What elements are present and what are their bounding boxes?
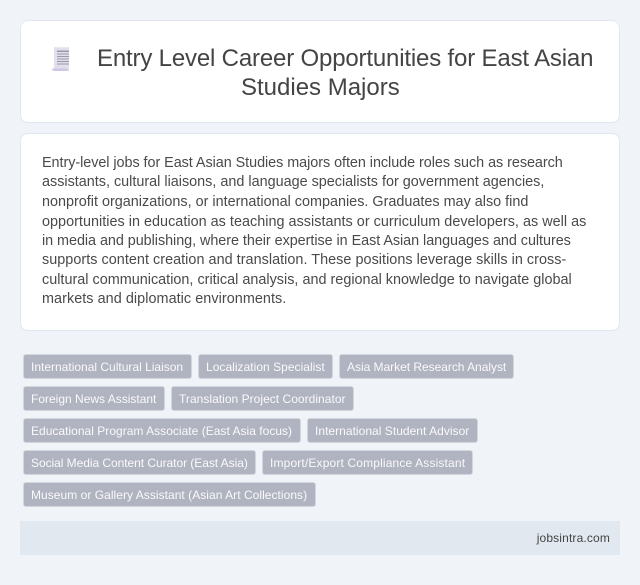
description text: Entry-level jobs for East Asian Studies majors often include roles such as research	[42, 155, 563, 171]
description text: markets and diplomatic environments.	[42, 291, 286, 307]
tag: Museum or Gallery Assistant (Asian Art Collections)	[31, 488, 307, 502]
tag: Localization Specialist	[206, 360, 325, 374]
description text	[42, 155, 586, 307]
tag	[23, 450, 256, 475]
description text: assistants, cultural liaisons, and language specialists for government agencies,	[42, 174, 544, 190]
title: Entry Level Career Opportunities for East Asian	[97, 45, 593, 72]
icon: document scroll	[52, 47, 70, 71]
tag	[339, 354, 514, 379]
tag	[23, 386, 165, 411]
tag: International Cultural Liaison	[31, 360, 183, 374]
title line 2: Studies Majors	[241, 74, 400, 101]
description text: in media and publishing, where their expertise in East Asian languages and cultures	[42, 233, 571, 249]
tag	[262, 450, 473, 475]
panel: title card	[20, 20, 620, 123]
tag	[307, 418, 478, 443]
panel: description card	[20, 133, 620, 331]
description text: supports content creation and translation. These positions leverage skills in cross-	[42, 252, 566, 268]
tag	[198, 354, 333, 379]
description text: nonprofit organizations, or international companies. Graduates may also find	[42, 194, 528, 210]
tag: Educational Program Associate (East Asia focus)	[31, 424, 292, 438]
tag	[171, 386, 354, 411]
description text: opportunities in education as teaching assistants or curriculum developers, as well as	[42, 214, 586, 230]
tag	[23, 482, 316, 507]
tag list	[23, 354, 514, 507]
footer source: jobsintra.com	[537, 531, 610, 545]
tag	[23, 354, 192, 379]
tag: Foreign News Assistant	[31, 392, 156, 406]
tag: Asia Market Research Analyst	[347, 360, 506, 374]
tag: Import/Export Compliance Assistant	[270, 456, 465, 470]
tag: Translation Project Coordinator	[179, 392, 346, 406]
tag	[23, 418, 301, 443]
tag: International Student Advisor	[315, 424, 469, 438]
tag: Social Media Content Curator (East Asia)	[31, 456, 248, 470]
footer bar	[20, 521, 620, 555]
description text: cultural communication, critical analysis, and regional knowledge to navigate global	[42, 272, 572, 288]
